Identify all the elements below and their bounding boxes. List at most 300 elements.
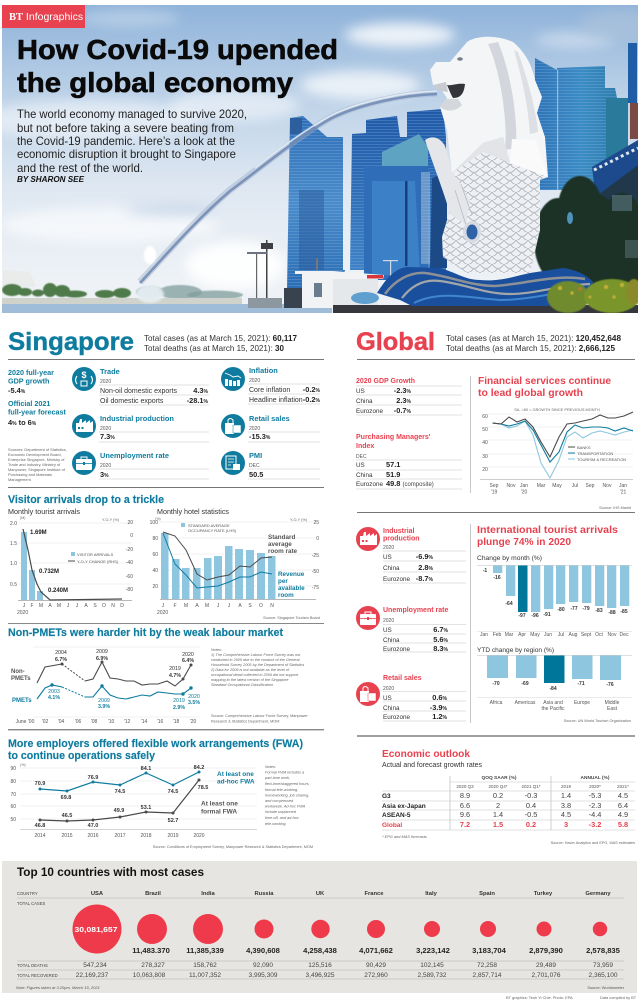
notes: labour market: 2) Data for 2006 is not available as the level of bbox=[210, 668, 290, 672]
stat: industrial production bbox=[99, 414, 209, 442]
total deaths values: 125,516 bbox=[308, 962, 332, 969]
chart: FWA line chart: 2015 bbox=[61, 833, 73, 839]
chart: monthly hotel statistics: F bbox=[173, 603, 177, 609]
stat: global retail sales: 1.2% bbox=[432, 712, 448, 721]
chart: change by month: -97 bbox=[518, 613, 526, 619]
table: economic outlook bbox=[382, 775, 635, 830]
chart: non-PMETs and PMETs: 2004 bbox=[55, 650, 67, 656]
chart: FWA line chart: 80 bbox=[10, 779, 16, 785]
table: economic outlook: 4.9 bbox=[618, 810, 628, 819]
icon: unemployment rate bbox=[72, 451, 96, 475]
subheading: growth rates: Actual and forecast growth rates bbox=[382, 762, 482, 769]
stat: inflation: Core inflation bbox=[249, 387, 290, 394]
chart: non-PMETs and PMETs: 6.7% bbox=[55, 657, 67, 663]
heading: flexible work arrangements bbox=[8, 738, 303, 762]
source: tourism board: Source: Singapore Tourism Board bbox=[263, 616, 320, 620]
chart: FWA line chart: At least one bbox=[201, 800, 238, 808]
panel: global GDP growth: US bbox=[356, 388, 365, 395]
stat: unemployment rate: 3% bbox=[100, 470, 109, 479]
icon: global retail sales bbox=[356, 682, 380, 706]
chart: monthly tourist arrivals: -80 bbox=[126, 587, 133, 593]
chart: monthly tourist arrivals: Monthly tourist arrivals bbox=[8, 507, 80, 516]
chart: YTD change by region: Middle bbox=[605, 700, 620, 706]
chart: FWA line chart: 2016 bbox=[87, 833, 99, 839]
icon: inflation bbox=[221, 367, 245, 391]
chart: non-PMETs and PMETs: 2020 bbox=[188, 694, 200, 700]
chart: non-PMETs and PMETs: '08 bbox=[91, 719, 97, 725]
chart: change by month: Jun bbox=[544, 632, 552, 638]
Global totals bbox=[446, 333, 621, 353]
stat: global industrial production: Industrial bbox=[383, 528, 415, 535]
chart: YTD change by region: Europe bbox=[574, 700, 590, 706]
stat: global retail sales: Eurozone bbox=[383, 714, 410, 721]
chart: non-PMETs and PMETs: 2020 bbox=[182, 652, 194, 658]
Singapore totals: Total cases (as at March 15, 2021): 60,117 bbox=[144, 333, 297, 343]
row labels: TOTAL DEATHS bbox=[17, 963, 48, 968]
stat: global unemployment: Unemployment rate bbox=[383, 607, 448, 614]
chart: monthly tourist arrivals: 1.69M bbox=[30, 530, 47, 536]
table: economic outlook: 2020 Q3 bbox=[456, 784, 474, 789]
chart: PMI by sector: Sep bbox=[490, 483, 499, 489]
stat: inflation: -0.2% bbox=[303, 395, 321, 404]
chart: non-PMETs and PMETs: PMETs bbox=[11, 676, 31, 682]
country names: India bbox=[201, 891, 216, 897]
stat: global industrial production: Eurozone bbox=[383, 576, 410, 583]
stat: global retail sales: Retail sales bbox=[383, 675, 422, 682]
total case values: 4,258,438 bbox=[303, 946, 337, 955]
stat: PMI: DEC bbox=[249, 463, 260, 469]
total case values bbox=[74, 925, 621, 955]
chart: non-PMETs and PMETs: 6.9% bbox=[96, 656, 108, 662]
chart: YTD change by region: -71 bbox=[577, 681, 585, 687]
chart: monthly tourist arrivals: N bbox=[111, 603, 115, 609]
country names: Turkey bbox=[534, 891, 553, 897]
panel: global GDP growth: China bbox=[356, 398, 373, 405]
stat: retail sales: -15.3% bbox=[249, 432, 271, 441]
chart: PMI by sector: May bbox=[552, 483, 562, 489]
chart: non-PMETs and PMETs: '06 bbox=[75, 719, 81, 725]
chart: FWA line chart: 76.9 bbox=[88, 775, 98, 781]
tag: BT Infographics: BT Infographics bbox=[9, 11, 83, 23]
shoreline, trees and water bbox=[2, 270, 332, 313]
notes: FWA: homeworking, job sharing, bbox=[265, 794, 309, 798]
notes: labour market: conducted in 2005 due to the conduct of the General bbox=[211, 658, 300, 662]
heading: international tourist arrivals: International tourist arrivals bbox=[477, 525, 618, 536]
table: economic outlook: 1.4 bbox=[561, 791, 571, 800]
notes: FWA: part-time work, bbox=[264, 776, 290, 780]
chart: PMI by sector: TOURISM & RECREATION bbox=[577, 457, 626, 462]
chart: change by month: May bbox=[530, 632, 540, 638]
chart: YTD change by region: the Pacific bbox=[541, 706, 565, 712]
chart: monthly tourist arrivals: Y-O-Y CHANGE (RHS) bbox=[77, 559, 119, 564]
chart: monthly hotel statistics: Monthly hotel statistics bbox=[157, 507, 229, 516]
heading: top 10 countries: Top 10 countries with most cases bbox=[17, 867, 204, 879]
source: conditions of employment: Source: Conditions of Employment Survey, Manpower Research & Statistics Department, MOM bbox=[153, 845, 313, 849]
chart: non-PMETs and PMETs: '12 bbox=[124, 719, 130, 725]
total recovered values: 2,365,100 bbox=[589, 972, 618, 979]
chart: change by month: -83 bbox=[595, 608, 603, 614]
panel: purchasing managers' index: DEC bbox=[356, 454, 367, 460]
heading: Global: Global bbox=[356, 328, 435, 356]
chart: monthly tourist arrivals: 0.5 bbox=[10, 582, 17, 588]
panel: Singapore GDP: 4% to 6% bbox=[8, 418, 37, 427]
notes: FWA: formal tele-working, bbox=[265, 788, 298, 792]
chart: FWA line chart: 70.9 bbox=[35, 781, 45, 787]
chart: change by month: Change by month (%) bbox=[477, 555, 542, 562]
chart: PMI by sector: 50 bbox=[482, 427, 488, 433]
table: economic outlook: 6.6 bbox=[460, 801, 470, 810]
note: figures timestamp: Note: Figures taken at 3.20pm, March 15, 2021 bbox=[16, 985, 100, 990]
table: economic outlook: 3.8 bbox=[561, 801, 571, 810]
stat: inflation: Inflation bbox=[249, 366, 278, 375]
chart: PMI by sector: '20 bbox=[521, 490, 527, 496]
Singapore totals bbox=[144, 333, 297, 353]
chart: monthly tourist arrivals: -60 bbox=[126, 574, 133, 580]
chart: non-PMETs and PMETs: 4.1% bbox=[48, 695, 60, 701]
notes: labour market: occupational detail collected in 2006 did not support bbox=[211, 673, 299, 677]
table: economic outlook: -2.3 bbox=[589, 801, 601, 810]
source: UN World Tourism Organization: Source: UN World Tourism Organization bbox=[564, 719, 631, 723]
chart: FWA line chart: At least one bbox=[217, 771, 254, 778]
notes: FWA: tele-working. bbox=[265, 822, 287, 826]
intro paragraph: the Covid-19 pandemic. Here’s a look at the bbox=[17, 134, 235, 148]
chart: YTD change by region: YTD change by region (%) bbox=[477, 647, 554, 654]
chart: change by month: Jan bbox=[480, 632, 488, 638]
chart: monthly hotel statistics: STANDARD AVERAGE bbox=[188, 523, 230, 528]
panel: global GDP growth: -2.3% bbox=[394, 386, 412, 395]
stat: global unemployment: 5.6% bbox=[433, 635, 449, 644]
notes: labour market: Notes: bbox=[211, 648, 222, 652]
chart: FWA line chart: 84.2 bbox=[194, 765, 204, 771]
chart: change by month: Jul bbox=[558, 632, 564, 638]
chart: monthly tourist arrivals: (M) bbox=[20, 516, 25, 520]
chart: FWA line chart: 2019 bbox=[167, 833, 179, 839]
heading: economic outlook: Economic outlook bbox=[382, 749, 470, 760]
icon: global unemployment bbox=[356, 606, 380, 630]
notes: labour market: mapping to the latest version of the Singapore bbox=[211, 678, 288, 682]
chart: monthly hotel statistics: J bbox=[217, 603, 220, 609]
Singapore sources: Manpower, Singapore Institute of bbox=[8, 467, 66, 472]
chart: monthly tourist arrivals: 1.0 bbox=[10, 561, 17, 567]
chart: change by month: -64 bbox=[505, 601, 513, 607]
Singapore sources: Sources: Department of Statistics, bbox=[8, 447, 67, 452]
icon: retail sales bbox=[221, 414, 245, 438]
chart: FWA line chart: 53.1 bbox=[141, 805, 151, 811]
table: economic outlook: 4.5 bbox=[618, 791, 628, 800]
stat: global retail sales: China bbox=[383, 705, 400, 712]
chart: monthly hotel statistics: room rate bbox=[268, 548, 298, 555]
chart: monthly tourist arrivals bbox=[8, 507, 133, 616]
country names: Italy bbox=[425, 891, 438, 897]
total recovered values: 2,857,714 bbox=[473, 972, 502, 979]
table note: * EPG and MAS forecasts bbox=[382, 834, 427, 839]
chart: non-PMETs and PMETs bbox=[11, 647, 200, 725]
stat: trade: 2020 bbox=[100, 379, 111, 385]
chart: monthly tourist arrivals: 0 bbox=[130, 533, 133, 539]
heading: financial services: to lead global growth bbox=[478, 388, 583, 399]
stat: global unemployment bbox=[383, 607, 466, 653]
row labels: COUNTRY bbox=[17, 891, 38, 896]
notes: FWA: time-off, and ad-hoc bbox=[265, 816, 299, 820]
chart: monthly hotel statistics: -50 bbox=[312, 569, 319, 575]
chart: non-PMETs and PMETs: 3.5% bbox=[188, 700, 200, 706]
chart: FWA line chart: 52.7 bbox=[168, 818, 178, 824]
panel: purchasing managers' index bbox=[356, 434, 462, 489]
chart: FWA line chart: 69.8 bbox=[61, 795, 71, 801]
panel: Singapore GDP: -5.4% bbox=[8, 386, 26, 395]
notes: FWA bbox=[264, 765, 310, 826]
chart: monthly tourist arrivals: 1.5 bbox=[10, 541, 17, 547]
fountain jet of water bbox=[140, 91, 437, 283]
chart: change by month: Nov bbox=[608, 632, 617, 638]
panel: Singapore GDP: full-year forecast bbox=[8, 408, 67, 416]
notes: FWA: workweek. Ad-hoc FWA bbox=[265, 804, 306, 808]
source: labour force survey: Source: Comprehensive Labour Force Survey, Manpower bbox=[211, 714, 309, 718]
heading: international tourist arrivals: plunge 74% in 2020 bbox=[477, 537, 571, 548]
stat: PMI: 50.5 bbox=[249, 470, 263, 479]
stat: global industrial production: 2.8% bbox=[418, 563, 434, 572]
table: economic outlook: 1.5 bbox=[493, 820, 503, 829]
country names: Germany bbox=[585, 891, 611, 897]
Global totals: Total cases (as at March 15, 2021): 120,452,648 bbox=[446, 333, 621, 343]
table: economic outlook: -3.2 bbox=[589, 820, 601, 829]
row labels: TOTAL CASES bbox=[17, 901, 46, 906]
fountain mist bbox=[136, 246, 164, 303]
chart: monthly tourist arrivals: 2020 bbox=[17, 610, 28, 616]
table: economic outlook: 9.6 bbox=[460, 810, 470, 819]
chart: monthly hotel statistics: Revenue bbox=[278, 571, 305, 578]
total case values: 11,483.370 bbox=[132, 946, 170, 955]
chart: YTD change by region: -69 bbox=[521, 681, 529, 687]
chart: monthly tourist arrivals: A bbox=[84, 603, 88, 609]
heading: Singapore: Singapore bbox=[8, 328, 134, 356]
chart: PMI by sector: Nov bbox=[603, 483, 612, 489]
total deaths values: 73,959 bbox=[593, 962, 613, 969]
panel: top 10 countries bbox=[2, 861, 637, 993]
stat: global unemployment: 8.3% bbox=[433, 644, 449, 653]
stat: retail sales: 2020 bbox=[249, 426, 260, 432]
stat: inflation: Headline inflation bbox=[249, 397, 303, 404]
tag: BT Infographics bbox=[2, 5, 85, 28]
chart: PMI by sector: 20 bbox=[482, 467, 488, 473]
chart: monthly tourist arrivals: 0.732M bbox=[39, 569, 59, 575]
chart: monthly tourist arrivals: M bbox=[39, 603, 43, 609]
chart: monthly hotel statistics: 25 bbox=[313, 520, 319, 526]
chart: change by month: Apr bbox=[518, 632, 526, 638]
table: economic outlook: 0.2 bbox=[526, 820, 536, 829]
byline: BY SHARON SEE bbox=[17, 175, 85, 184]
chart: non-PMETs and PMETs: '18 bbox=[173, 719, 179, 725]
chart: monthly tourist arrivals: 2.0 bbox=[10, 521, 17, 527]
total case values: 2,879,390 bbox=[529, 946, 563, 955]
heading: flexible work arrangements: More employers offered flexible work arrangements (FWA) bbox=[8, 738, 303, 750]
chart: non-PMETs and PMETs: 2019 bbox=[169, 666, 181, 672]
table: economic outlook: 2 bbox=[496, 801, 500, 810]
chart: YTD change by region: -84 bbox=[549, 686, 557, 692]
total deaths values: 92,090 bbox=[253, 962, 273, 969]
chart: PMI by sector: Jan bbox=[520, 483, 528, 489]
chart: monthly hotel statistics: N bbox=[270, 603, 274, 609]
chart: change by month: Feb bbox=[493, 632, 502, 638]
chart: monthly hotel statistics: M bbox=[184, 603, 188, 609]
chart: FWA line chart bbox=[10, 763, 257, 839]
chart: change by month bbox=[477, 555, 632, 638]
notes: FWA: and compressed bbox=[265, 799, 294, 803]
dark quay bbox=[333, 305, 638, 313]
chart: monthly hotel statistics: A bbox=[195, 603, 199, 609]
chart: change by month: Aug bbox=[569, 632, 578, 638]
notes: FWA: Formal FWA includes a bbox=[265, 770, 304, 774]
chart: non-PMETs and PMETs: '10 bbox=[108, 719, 114, 725]
stat: trade: Oil domestic exports bbox=[100, 398, 164, 405]
stat: global retail sales bbox=[383, 675, 466, 721]
chart: PMI by sector: Jan bbox=[619, 483, 627, 489]
chart: monthly hotel statistics: 2020 bbox=[157, 610, 168, 616]
icon: trade bbox=[72, 367, 96, 391]
stat: trade: -28.1% bbox=[187, 396, 209, 405]
icon: PMI bbox=[221, 451, 245, 475]
chart: PMI by sector: '19 bbox=[491, 490, 497, 496]
total case values: 3,223,142 bbox=[416, 946, 450, 955]
total recovered values: 3,496,925 bbox=[306, 972, 335, 979]
chart: change by month: Mar bbox=[505, 632, 514, 638]
chart: monthly tourist arrivals: VISITOR ARRIVALS bbox=[77, 552, 114, 557]
chart: PMI by sector: Nov bbox=[507, 483, 516, 489]
panel: global GDP growth: 2.3% bbox=[396, 396, 412, 405]
table: economic outlook: 3 bbox=[564, 820, 568, 829]
table: economic outlook: 7.2 bbox=[460, 820, 470, 829]
chart: FWA line chart: 2018 bbox=[140, 833, 152, 839]
credit: BT graphics: BT graphics: Teoh Yi Chie. Photo: EPA bbox=[506, 995, 573, 1000]
chart: change by month: -1 bbox=[483, 568, 487, 574]
table: economic outlook: 6.4 bbox=[618, 801, 628, 810]
total deaths values: 29,489 bbox=[536, 962, 556, 969]
stat: global unemployment: Eurozone bbox=[383, 646, 410, 653]
total recovered values: 2,589,732 bbox=[418, 972, 447, 979]
source: Worldometer: Source: Worldometer bbox=[587, 985, 625, 990]
chart: monthly hotel statistics: 40 bbox=[152, 568, 158, 574]
source: labour force survey bbox=[211, 714, 309, 724]
chart: PMI by sector: SA, >50 = GROWTH SINCE PREVIOUS MONTH bbox=[514, 407, 600, 412]
stat: global industrial production: US bbox=[383, 554, 392, 561]
icon: industrial production bbox=[72, 414, 96, 438]
chart: monthly hotel statistics: -25 bbox=[312, 553, 319, 559]
stat: retail sales: Retail sales bbox=[249, 414, 290, 423]
stat: unemployment rate bbox=[99, 451, 209, 479]
chart: FWA line chart: 2020 bbox=[193, 833, 205, 839]
chart: monthly hotel statistics: available bbox=[278, 585, 305, 592]
total deaths values: 90,429 bbox=[366, 962, 386, 969]
chart: FWA line chart: 78.5 bbox=[198, 785, 208, 791]
chart: FWA line chart: 2017 bbox=[114, 833, 126, 839]
chart: monthly hotel statistics: average bbox=[268, 541, 292, 548]
chart: monthly tourist arrivals: M bbox=[57, 603, 61, 609]
Singapore sources: Trade and Industry, Ministry of bbox=[8, 462, 61, 467]
chart: monthly hotel statistics: J bbox=[228, 603, 231, 609]
chart: FWA line chart: 74.5 bbox=[115, 789, 125, 795]
chart: monthly hotel statistics: 80 bbox=[152, 536, 158, 542]
Singapore sources: Economic Development Board, bbox=[8, 452, 62, 457]
chart: monthly hotel statistics: OCCUPANCY RATE (LHS) bbox=[188, 528, 237, 533]
heading: visitor arrivals: Visitor arrivals drop to a trickle bbox=[8, 494, 164, 506]
total case values: 11,385,339 bbox=[186, 946, 224, 955]
total recovered values: 10,063,808 bbox=[133, 972, 166, 979]
stat: global retail sales: 0.6% bbox=[432, 693, 448, 702]
chart: non-PMETs and PMETs: 6.4% bbox=[182, 658, 194, 664]
total case values: 2,578,835 bbox=[586, 946, 621, 955]
table: economic outlook: 0.4 bbox=[526, 801, 536, 810]
stat: global unemployment: China bbox=[383, 637, 400, 644]
stat: inflation: 2020 bbox=[249, 378, 260, 384]
stat: inflation bbox=[248, 366, 321, 404]
stat: industrial production: Industrial production bbox=[100, 414, 174, 423]
notes: FWA: flexi-time/staggered hours, bbox=[265, 782, 310, 786]
chart: FWA line chart: ad-hoc FWA bbox=[217, 778, 255, 786]
table: economic outlook: 2020 Q4* bbox=[488, 784, 508, 789]
notes: labour market: Household Survey 2005 by the Department of Statistics bbox=[211, 663, 304, 667]
chart: change by month: -77 bbox=[570, 606, 578, 612]
Singapore sources bbox=[8, 447, 67, 482]
chart: change by month: -91 bbox=[543, 612, 551, 618]
stat: trade: Non-oil domestic exports bbox=[100, 388, 178, 395]
panel: purchasing managers' index: 51.9 bbox=[386, 470, 400, 479]
chart: YTD change by region bbox=[477, 647, 632, 712]
chart: non-PMETs and PMETs: 3.9% bbox=[98, 704, 110, 710]
chart: monthly hotel statistics: S bbox=[248, 603, 252, 609]
intro paragraph: but not before taking a severe beating from bbox=[17, 121, 234, 135]
chart: non-PMETs and PMETs: '04 bbox=[58, 719, 64, 725]
country names: Spain bbox=[479, 891, 495, 897]
source: Haver Analytics: Source: Haver Analytics and EPG, MAS estimates bbox=[551, 841, 635, 845]
stat: global retail sales: 2020 bbox=[383, 686, 394, 692]
stat: retail sales bbox=[248, 414, 320, 442]
hero photo: Merlion and Marina Bay skyline bbox=[0, 5, 640, 313]
intro paragraph: economic disruption it brought to Singapore bbox=[17, 147, 236, 161]
chart: monthly tourist arrivals: 0.240M bbox=[48, 588, 68, 594]
chart: non-PMETs and PMETs: PMETs bbox=[12, 698, 32, 704]
notes: labour market: 1) The Comprehensive Labour Force Survey was not bbox=[211, 653, 301, 657]
chart: monthly hotel statistics: -75 bbox=[312, 585, 319, 591]
chart: PMI by sector: Sep bbox=[586, 483, 595, 489]
Merlion statue bbox=[425, 37, 548, 273]
chart: monthly hotel statistics: A bbox=[238, 603, 242, 609]
chart: FWA line chart: 74.5 bbox=[168, 789, 178, 795]
intro paragraph bbox=[17, 107, 247, 175]
chart: PMI by sector: TRANSPORTATION bbox=[577, 451, 613, 456]
chart: monthly tourist arrivals: A bbox=[48, 603, 52, 609]
chart: non-PMETs and PMETs: 2009 bbox=[96, 649, 108, 655]
chart: non-PMETs and PMETs: 2.9% bbox=[173, 705, 185, 711]
panel: purchasing managers' index: China bbox=[356, 472, 373, 479]
table: economic outlook: 8.9 bbox=[460, 791, 470, 800]
chart: monthly hotel statistics: Y-O-Y (%) bbox=[290, 518, 308, 522]
Singapore sources: Enterprise Singapore, Ministry of bbox=[8, 457, 65, 462]
Global totals: Total deaths (as at March 15, 2021): 2,666,125 bbox=[446, 343, 615, 353]
chart: monthly hotel statistics: room bbox=[278, 592, 294, 599]
chart: monthly hotel statistics: 20 bbox=[152, 584, 158, 590]
chart: monthly hotel statistics: 60 bbox=[152, 552, 158, 558]
chart: non-PMETs and PMETs: '16 bbox=[157, 719, 163, 725]
country names: USA bbox=[91, 891, 104, 897]
chart: non-PMETs and PMETs: '02 bbox=[42, 719, 48, 725]
panel: purchasing managers' index: Eurozone bbox=[356, 481, 383, 488]
chart: change by month: Oct bbox=[595, 632, 603, 638]
stat: global unemployment: US bbox=[383, 627, 392, 634]
total deaths values bbox=[83, 962, 613, 969]
table: economic outlook: 5.8 bbox=[618, 820, 628, 829]
bubble chart: total cases bbox=[72, 904, 607, 954]
table: economic outlook: ASEAN-5 bbox=[382, 812, 411, 819]
